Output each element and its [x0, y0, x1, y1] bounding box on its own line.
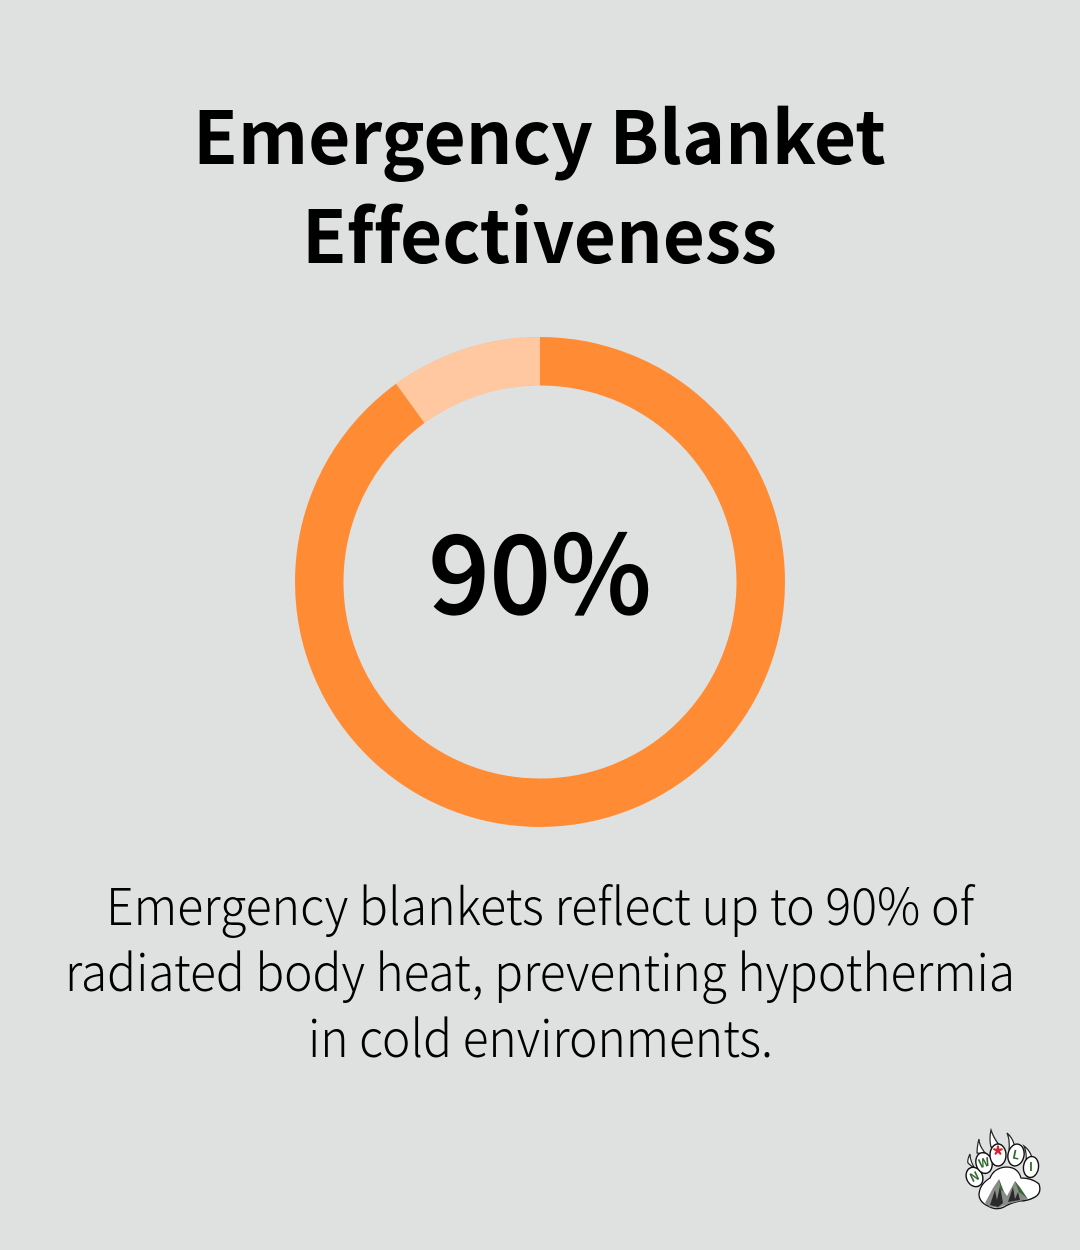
description: radiated body heat, preventing hypothermia: [65, 932, 1015, 1006]
description: [65, 866, 1015, 1072]
donut chart: 90%: [319, 361, 761, 803]
title: [193, 80, 886, 285]
claws: [968, 1130, 1033, 1170]
icon: paw logo: *: [992, 1137, 1004, 1172]
title: Effectiveness: [302, 179, 777, 285]
title: Emergency Blanket: [193, 80, 886, 186]
toes with letters: [963, 1143, 1040, 1189]
icon: paw logo: N: [967, 1167, 982, 1186]
icon: paw logo: [963, 1130, 1040, 1209]
pad: [979, 1167, 1040, 1209]
icon: paw logo: L: [1011, 1145, 1021, 1164]
value: 90%: 90%: [428, 490, 652, 646]
icon: paw logo: I: [1029, 1158, 1033, 1175]
description: in cold environments.: [308, 998, 773, 1072]
icon: paw logo: W: [976, 1153, 991, 1172]
mountains: [985, 1179, 1028, 1208]
description: Emergency blankets reflect up to 90% of: [106, 866, 976, 940]
